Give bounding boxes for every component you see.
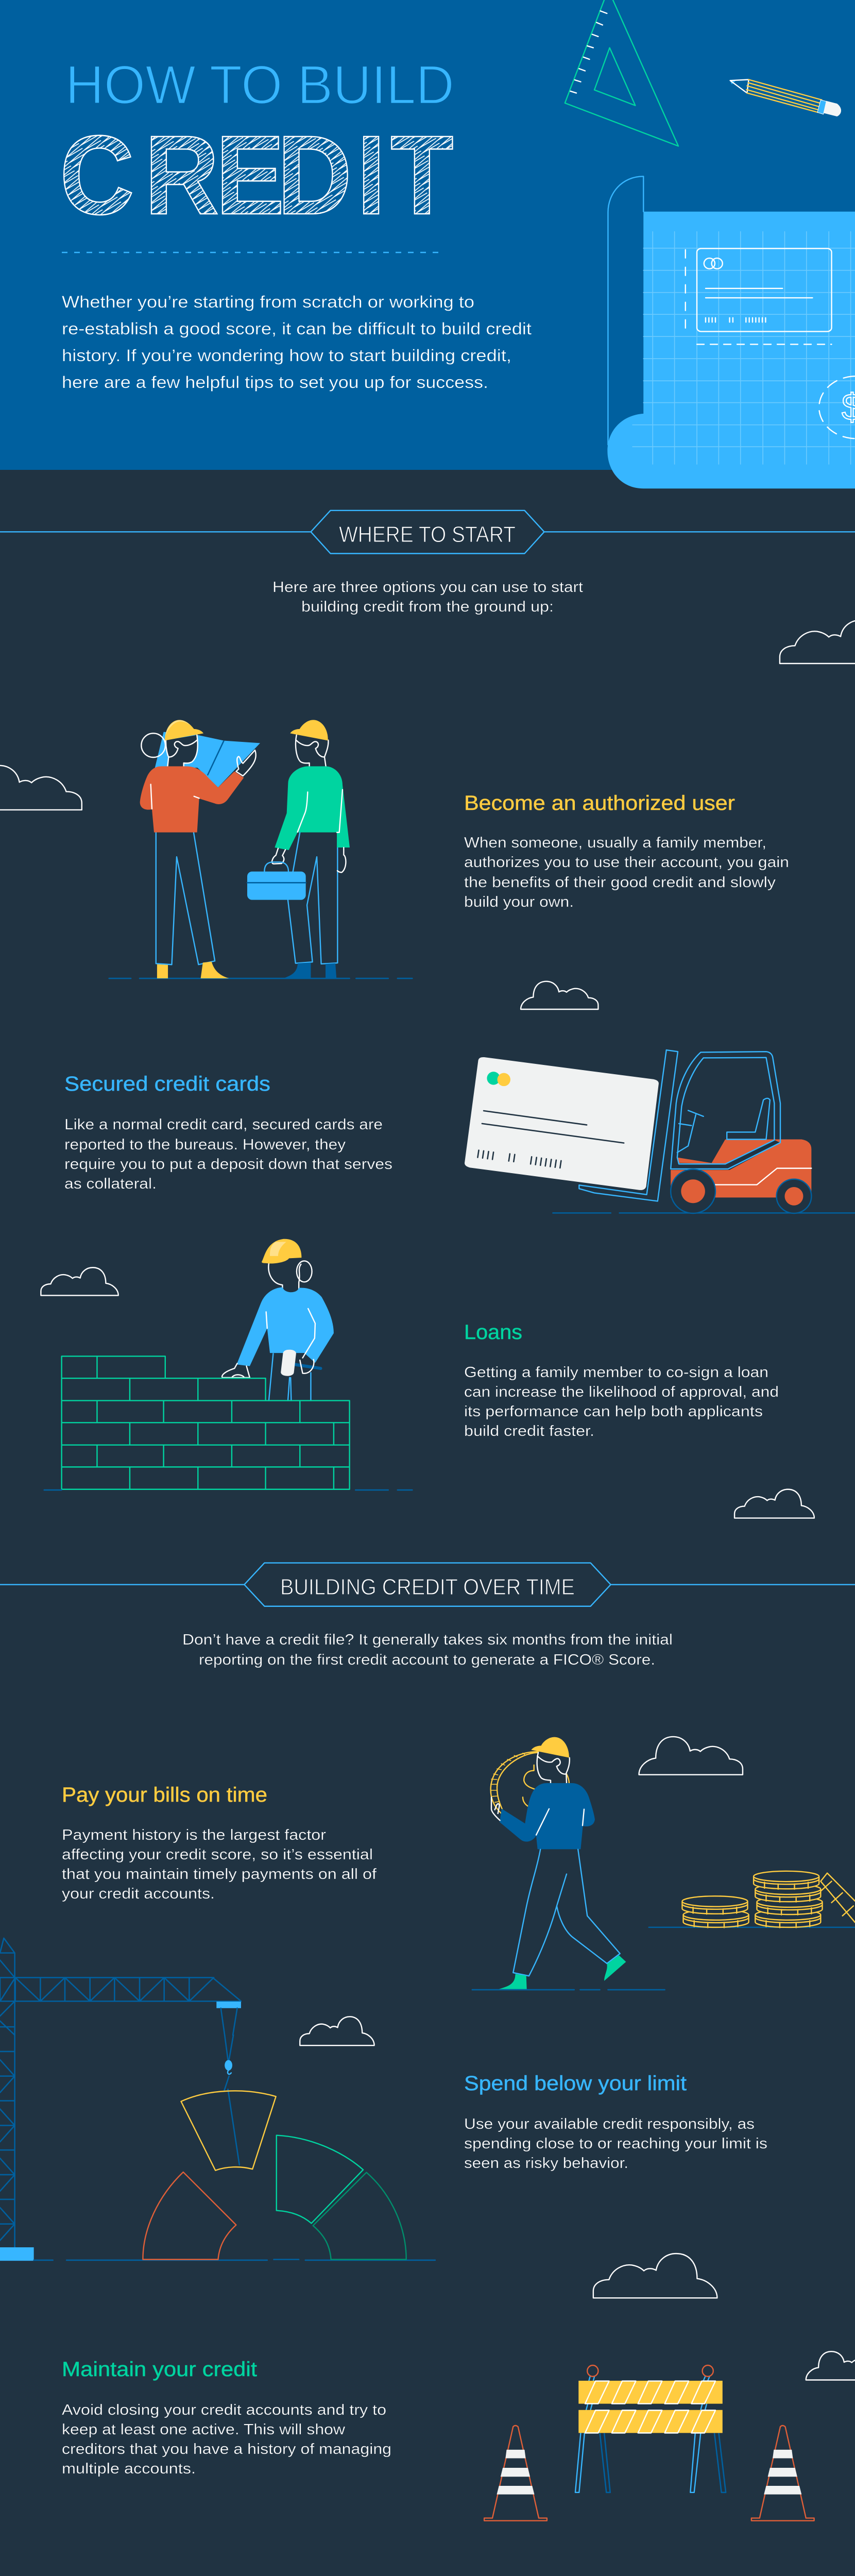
worker: [222, 1239, 334, 1401]
blueprint grid: [632, 232, 855, 464]
text: pay your bills on time: that you maintain timely payments on all of: [62, 1866, 377, 1883]
text: pay your bills on time: [62, 1827, 377, 1902]
intro text: [62, 293, 532, 392]
intro: where to start: Here are three options you can use to start: [272, 579, 583, 596]
icon: cloud: [734, 1489, 814, 1518]
text: secured credit cards: require you to put a deposit down that serves: [64, 1156, 392, 1173]
icon: cloud: [593, 2253, 717, 2298]
text: become an authorized user: build your own.: [464, 894, 574, 910]
illustration: worker carrying coin upper body: [491, 1737, 595, 1849]
text: maintain your credit: [62, 2402, 391, 2477]
brick wall: [62, 1356, 350, 1489]
illustration: two workers upper bodies: [140, 720, 350, 900]
man with briefcase: [247, 720, 350, 900]
icon: set square ruler: [565, 0, 678, 146]
section ribbon: building credit over time: [0, 1563, 855, 1606]
text: maintain your credit: creditors that you have a history of managing: [62, 2441, 391, 2458]
intro: building credit over time: Don’t have a credit file? It generally takes six months from the initial: [182, 1632, 673, 1648]
ground line: [44, 1489, 412, 1490]
heading: loans: Loans: [464, 1321, 522, 1344]
icon: cloud: [639, 1737, 743, 1775]
icon: crane hook: [224, 2060, 240, 2165]
text: pay your bills on time: Payment history is the largest factor: [62, 1827, 326, 1843]
text: pay your bills on time: your credit accounts.: [62, 1886, 215, 1902]
intro text: Whether you’re starting from scratch or working to: [62, 293, 474, 311]
illustration: coin stacks: [649, 1871, 855, 1928]
text: pay your bills on time: affecting your credit score, so it’s essential: [62, 1846, 373, 1863]
illustration: coin carrier legs: [472, 1850, 665, 1990]
heading: spend below your limit: Spend below your limit: [464, 2072, 687, 2095]
icon: pencil: [730, 80, 841, 116]
panel: forklift and bricklayer illustrations: [41, 1050, 855, 1518]
illustration: header blueprint, ruler and pencil: [565, 0, 855, 488]
intro: building credit over time: [182, 1632, 673, 1668]
text: loans: [464, 1364, 779, 1439]
text: loans: can increase the likelihood of approval, and: [464, 1384, 779, 1400]
icon: cloud: [780, 620, 855, 664]
text: spend below your limit: Use your available credit responsibly, as: [464, 2116, 755, 2132]
intro text: history. If you’re wondering how to start building credit,: [62, 346, 511, 365]
coin on shoulder: [491, 1752, 569, 1814]
intro: where to start: building credit from the ground up:: [301, 599, 554, 615]
text: secured credit cards: [64, 1116, 392, 1192]
heading: pay your bills on time: Pay your bills on time: [62, 1784, 267, 1806]
torso: [500, 1783, 595, 1849]
icon: cloud: [41, 1267, 118, 1295]
intro text: re-establish a good score, it can be difficult to build credit: [62, 319, 532, 338]
woman with map: [140, 720, 260, 833]
man legs and boots: [284, 832, 337, 978]
text: loans: its performance can help both applicants: [464, 1403, 763, 1420]
text: become an authorized user: authorizes you to use their account, you gain: [464, 854, 789, 871]
woman legs and boots: [156, 832, 229, 978]
text: spend below your limit: [464, 2116, 767, 2172]
head and hat: [537, 1753, 570, 1783]
blueprint sheet: [607, 176, 855, 488]
icon: cloud: [806, 2351, 855, 2380]
intro text: here are a few helpful tips to set you up for success.: [62, 373, 488, 392]
illustration: forklift carrying credit card: [465, 1050, 855, 1213]
text: become an authorized user: [464, 835, 789, 910]
forklift body: [671, 1139, 811, 1197]
ground line: [109, 978, 412, 979]
intro: building credit over time: reporting on the first credit account to generate a FICO® Score.: [199, 1652, 655, 1668]
text: maintain your credit: keep at least one active. This will show: [62, 2421, 346, 2438]
dollar coin dashed outline: [819, 376, 855, 438]
title: how to build: HOW TO BUILD: [65, 55, 454, 115]
heading: maintain your credit: Maintain your credit: [62, 2358, 257, 2381]
section ribbon: where to start: WHERE TO START: [339, 522, 516, 547]
text: loans: Getting a family member to co-sign a loan: [464, 1364, 768, 1381]
icon: cloud: [521, 981, 598, 1009]
header panel background: [0, 0, 855, 470]
heading: secured credit cards: Secured credit cards: [64, 1073, 270, 1095]
mast and forks: [579, 1050, 678, 1201]
intro: where to start: [272, 579, 583, 615]
panel: coin carrier legs and crane illustrations: [0, 1737, 855, 2045]
icon: traffic cone left: [484, 2426, 547, 2521]
dashed divider: [62, 252, 439, 253]
text: secured credit cards: reported to the bureaus. However, they: [64, 1137, 346, 1153]
text: maintain your credit: multiple accounts.: [62, 2461, 196, 2477]
panel: where to start illustrations 1: [0, 620, 855, 1009]
illustration: crane jib: [0, 1938, 241, 2035]
icon: traffic cone right: [751, 2426, 814, 2521]
text: become an authorized user: the benefits of their good credit and slowly: [464, 874, 776, 891]
text: loans: build credit faster.: [464, 1423, 594, 1439]
icon: cloud: [300, 2016, 374, 2045]
icon: cloud: [0, 766, 82, 810]
chart: score gauge pieces: [34, 2091, 435, 2260]
briefcase: [247, 862, 306, 900]
text: spend below your limit: seen as risky behavior.: [464, 2155, 628, 2172]
illustration: barricade: [575, 2365, 726, 2493]
text: become an authorized user: When someone, usually a family member,: [464, 835, 766, 851]
illustration: crane tower: [0, 2035, 233, 2261]
title: credit hatched: CREDIT: [60, 112, 454, 238]
credit card sketch: [686, 248, 832, 344]
credit card: [465, 1057, 659, 1190]
text: maintain your credit: Avoid closing your credit accounts and try to: [62, 2402, 386, 2418]
section ribbon: building credit over time: BUILDING CREDIT OVER TIME: [280, 1574, 575, 1600]
illustration: worker building brick wall: [44, 1239, 412, 1490]
text: secured credit cards: Like a normal credit card, secured cards are: [64, 1116, 383, 1133]
section ribbon: where to start: [0, 511, 855, 553]
panel: gauge crane and barricade illustrations: [0, 2035, 855, 2521]
text: spend below your limit: spending close to or reaching your limit is: [464, 2136, 767, 2152]
heading: become an authorized user: Become an authorized user: [464, 792, 735, 815]
text: secured credit cards: as collateral.: [64, 1176, 157, 1192]
illustration: legs and ground under two workers: [109, 832, 412, 978]
